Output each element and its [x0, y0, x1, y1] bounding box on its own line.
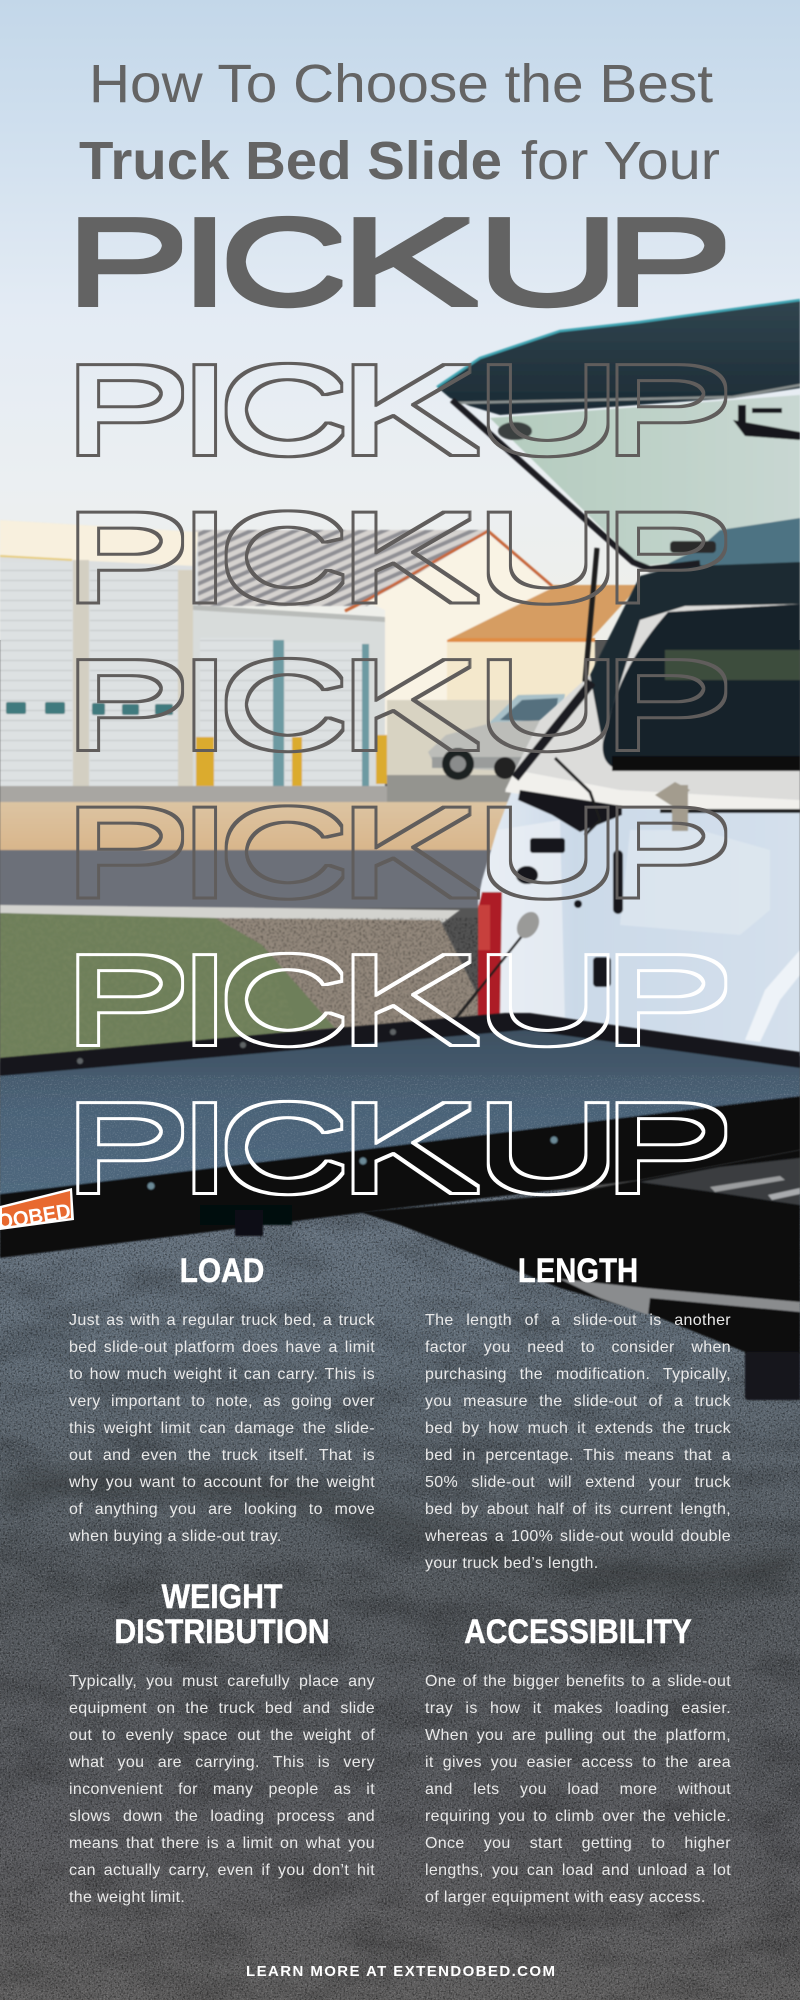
outlined PICKUP row 1: U	[474, 342, 622, 478]
sidewalk	[0, 905, 460, 925]
outlined PICKUP row 3	[64, 637, 735, 773]
outlined PICKUP row 1: I	[177, 342, 232, 478]
raised cab roof in glass	[655, 518, 800, 570]
outlined PICKUP row 4: K	[337, 784, 480, 920]
hatch underside glass	[490, 395, 800, 566]
outlined PICKUP row 1	[64, 342, 735, 478]
body text: weight distribution	[69, 1673, 375, 1906]
sky	[0, 0, 800, 640]
outlined PICKUP row 1: C	[218, 342, 348, 478]
panel: weight distribution	[69, 1578, 375, 1906]
title line 1: How To Choose the Best	[89, 54, 713, 114]
solid PICKUP: C	[218, 194, 348, 330]
body text: load: when buying a slide-out tray.	[69, 1528, 282, 1545]
white outlined PICKUP row 5: I	[177, 932, 232, 1068]
body text: load: why you want to account for the weight	[69, 1474, 375, 1491]
back rail	[0, 1013, 800, 1076]
body text: weight distribution: what you are carrying. This is very	[69, 1754, 375, 1771]
white outlined PICKUP row 5: U	[474, 932, 622, 1068]
body text: weight distribution: can actually carry, even if you don’t hit	[69, 1862, 375, 1879]
under-truck shadow and bumper	[360, 1150, 800, 1400]
deck surface	[0, 1026, 800, 1196]
body text: length: whereas a 100% slide-out would double	[425, 1528, 731, 1545]
chrome strip	[560, 1279, 800, 1315]
front beam	[0, 1096, 800, 1258]
body text: length: bed by about half of its current length,	[425, 1501, 731, 1518]
outlined PICKUP row 2: I	[177, 490, 232, 626]
outlined PICKUP row 2: K	[337, 490, 480, 626]
rust roof edge	[345, 531, 552, 611]
white outlined PICKUP row 5: P	[64, 932, 191, 1068]
left building	[0, 520, 198, 790]
outlined PICKUP row 3: P	[64, 637, 191, 773]
shaded road	[0, 850, 530, 908]
truck	[437, 300, 800, 1056]
solid PICKUP: P	[602, 194, 735, 330]
body text: load: Just as with a regular truck bed, a truck	[69, 1312, 375, 1329]
heading: length: LENGTH	[518, 1252, 638, 1290]
outlined PICKUP row 3: U	[474, 637, 622, 773]
white outlined PICKUP row 6: U	[474, 1080, 622, 1216]
shell window	[590, 555, 800, 771]
support strut	[585, 548, 597, 682]
body text: accessibility: and lets you load more without	[425, 1781, 731, 1798]
outlined PICKUP row 3: P	[602, 637, 735, 773]
heading: accessibility: ACCESSIBILITY	[464, 1613, 692, 1651]
white outlined PICKUP row 5: K	[337, 932, 480, 1068]
outlined PICKUP row 4: I	[177, 784, 232, 920]
background scenery: buildings and ground	[0, 520, 640, 1062]
body text: length: you measure the slide-out of a truck	[425, 1393, 731, 1410]
rivets	[77, 1029, 558, 1190]
white outlined PICKUP row 5: P	[602, 932, 735, 1068]
cable	[453, 908, 544, 1022]
white outlined PICKUP row 6	[64, 1080, 735, 1216]
body text: load: very important to note, as going over	[69, 1393, 375, 1410]
body text: accessibility: One of the bigger benefits to a slide-out	[425, 1673, 731, 1690]
body text: weight distribution: means that there is a limit on what you	[69, 1835, 375, 1852]
body text: weight distribution: slows down the loading process and	[69, 1808, 375, 1825]
slide-out platform	[0, 1013, 800, 1258]
grass	[0, 913, 335, 1062]
body text: load: bed slide-out platform does have a limit	[69, 1339, 375, 1356]
body text: accessibility: requiring you to climb over the vehicle.	[425, 1808, 731, 1825]
body text: length: The length of a slide-out is another	[425, 1312, 731, 1329]
solid PICKUP	[64, 194, 735, 330]
outlined PICKUP row 2: U	[474, 490, 622, 626]
road strip behind pickup	[387, 775, 517, 805]
heading: weight distribution: DISTRIBUTION	[114, 1613, 330, 1651]
body text: weight distribution: out to evenly space out the weight of	[69, 1727, 375, 1744]
outlined PICKUP row 4: P	[64, 784, 191, 920]
body text: accessibility: of larger equipment with easy access.	[425, 1889, 706, 1906]
panel: accessibility	[425, 1613, 731, 1906]
body text: length: bed in percentage. This means that a	[425, 1447, 731, 1464]
hatch teal edge	[437, 300, 800, 387]
white outlined PICKUP row 6: P	[64, 1080, 191, 1216]
white outlined PICKUP row 6: I	[177, 1080, 232, 1216]
outlined PICKUP row 2: P	[64, 490, 191, 626]
silver pickup	[428, 694, 565, 780]
white outlined PICKUP row 5: C	[218, 932, 348, 1068]
gravel patch	[200, 918, 500, 1045]
outlined PICKUP row 2	[64, 490, 735, 626]
outlined PICKUP row 4: U	[474, 784, 622, 920]
solid PICKUP: P	[64, 194, 191, 330]
white outlined PICKUP row 6: C	[218, 1080, 348, 1216]
body text: load	[69, 1312, 375, 1545]
white outlined PICKUP row 6: K	[337, 1080, 480, 1216]
body text: length: purchasing the modification. Typically,	[425, 1366, 731, 1383]
step panel	[640, 1158, 800, 1205]
heading: load: LOAD	[180, 1252, 264, 1290]
glass seal	[452, 400, 700, 569]
background right pale area	[387, 700, 527, 790]
panel: load	[69, 1252, 375, 1545]
panel: length	[425, 1252, 731, 1572]
glass sticker	[733, 405, 800, 440]
solid PICKUP: U	[474, 194, 622, 330]
footer: learn more: LEARN MORE AT EXTENDOBED.COM	[246, 1963, 555, 1980]
red tail light	[478, 892, 502, 1018]
outlined PICKUP row 4: C	[218, 784, 348, 920]
hatch top panel	[437, 300, 800, 415]
camper shell	[505, 570, 800, 812]
bed wall	[478, 790, 800, 1056]
solid PICKUP: K	[337, 194, 480, 330]
body text: length: 50% slide-out will extend your truck	[425, 1474, 731, 1491]
outlined PICKUP row 3: K	[337, 637, 480, 773]
body text: weight distribution: the weight limit.	[69, 1889, 185, 1906]
body text: load: of anything you are looking to move	[69, 1501, 375, 1518]
body text: weight distribution: equipment on the truck bed and slide	[69, 1700, 375, 1717]
body text: load: to how much weight it can carry. This is	[69, 1366, 375, 1383]
outlined PICKUP row 1: P	[602, 342, 735, 478]
outlined PICKUP row 3: C	[218, 637, 348, 773]
small garage building	[193, 605, 385, 790]
outlined PICKUP row 4	[64, 784, 735, 920]
white outlined PICKUP row 6: P	[602, 1080, 735, 1216]
body text: length	[425, 1312, 731, 1572]
title line 2	[79, 131, 720, 191]
body text: load: out and even the truck itself. That is	[69, 1447, 375, 1464]
body text: weight distribution: Typically, you must carefully place any	[69, 1673, 375, 1690]
body text: length: factor you need to consider when	[425, 1339, 731, 1356]
white gable wall	[367, 534, 552, 740]
gray pad	[0, 786, 530, 804]
body text: accessibility: it gives you easier access to the area	[425, 1754, 731, 1771]
hatch lamp	[670, 541, 716, 553]
yellow bollards	[196, 735, 387, 789]
striped metal roof	[195, 530, 488, 606]
heading: weight distribution: WEIGHT	[161, 1578, 283, 1616]
heading: weight distribution	[114, 1578, 330, 1651]
far orange roof building	[445, 585, 640, 750]
title	[79, 54, 720, 191]
white outlined PICKUP row 5	[64, 932, 735, 1068]
outlined PICKUP row 4: P	[602, 784, 735, 920]
body text: accessibility: tray is how it makes loading easier.	[425, 1700, 731, 1717]
body text: weight distribution: inconvenient for many people as it	[69, 1781, 375, 1798]
hitch receiver	[745, 1352, 800, 1400]
outlined PICKUP row 3: I	[177, 637, 232, 773]
outlined PICKUP row 2: P	[602, 490, 735, 626]
body text: accessibility: When you are pulling out the platform,	[425, 1727, 731, 1744]
body text: accessibility: lengths, you can load and unload a lot	[425, 1862, 731, 1879]
bracket	[200, 1205, 292, 1225]
body text: length: your truck bed’s length.	[425, 1555, 599, 1572]
body crease line	[660, 809, 800, 813]
wiring and hardware	[516, 790, 623, 987]
asphalt ground	[0, 1190, 800, 2000]
door windows	[6, 702, 173, 715]
outlined PICKUP row 1: K	[337, 342, 480, 478]
body text: accessibility	[425, 1673, 731, 1906]
solid PICKUP: I	[177, 194, 232, 330]
body text: accessibility: Once you start getting to higher	[425, 1835, 731, 1852]
body text: length: bed by how much it extends the truck	[425, 1420, 731, 1437]
sand lot	[0, 802, 530, 852]
title line 2: Truck Bed Slide	[79, 131, 502, 191]
body text: load: this weight limit can damage the slide-	[69, 1420, 375, 1437]
title line 2: for Your	[521, 131, 720, 191]
silver hinge	[655, 782, 690, 831]
outlined PICKUP row 1: P	[64, 342, 191, 478]
hatch strut bar	[453, 385, 800, 403]
outlined PICKUP row 2: C	[218, 490, 348, 626]
